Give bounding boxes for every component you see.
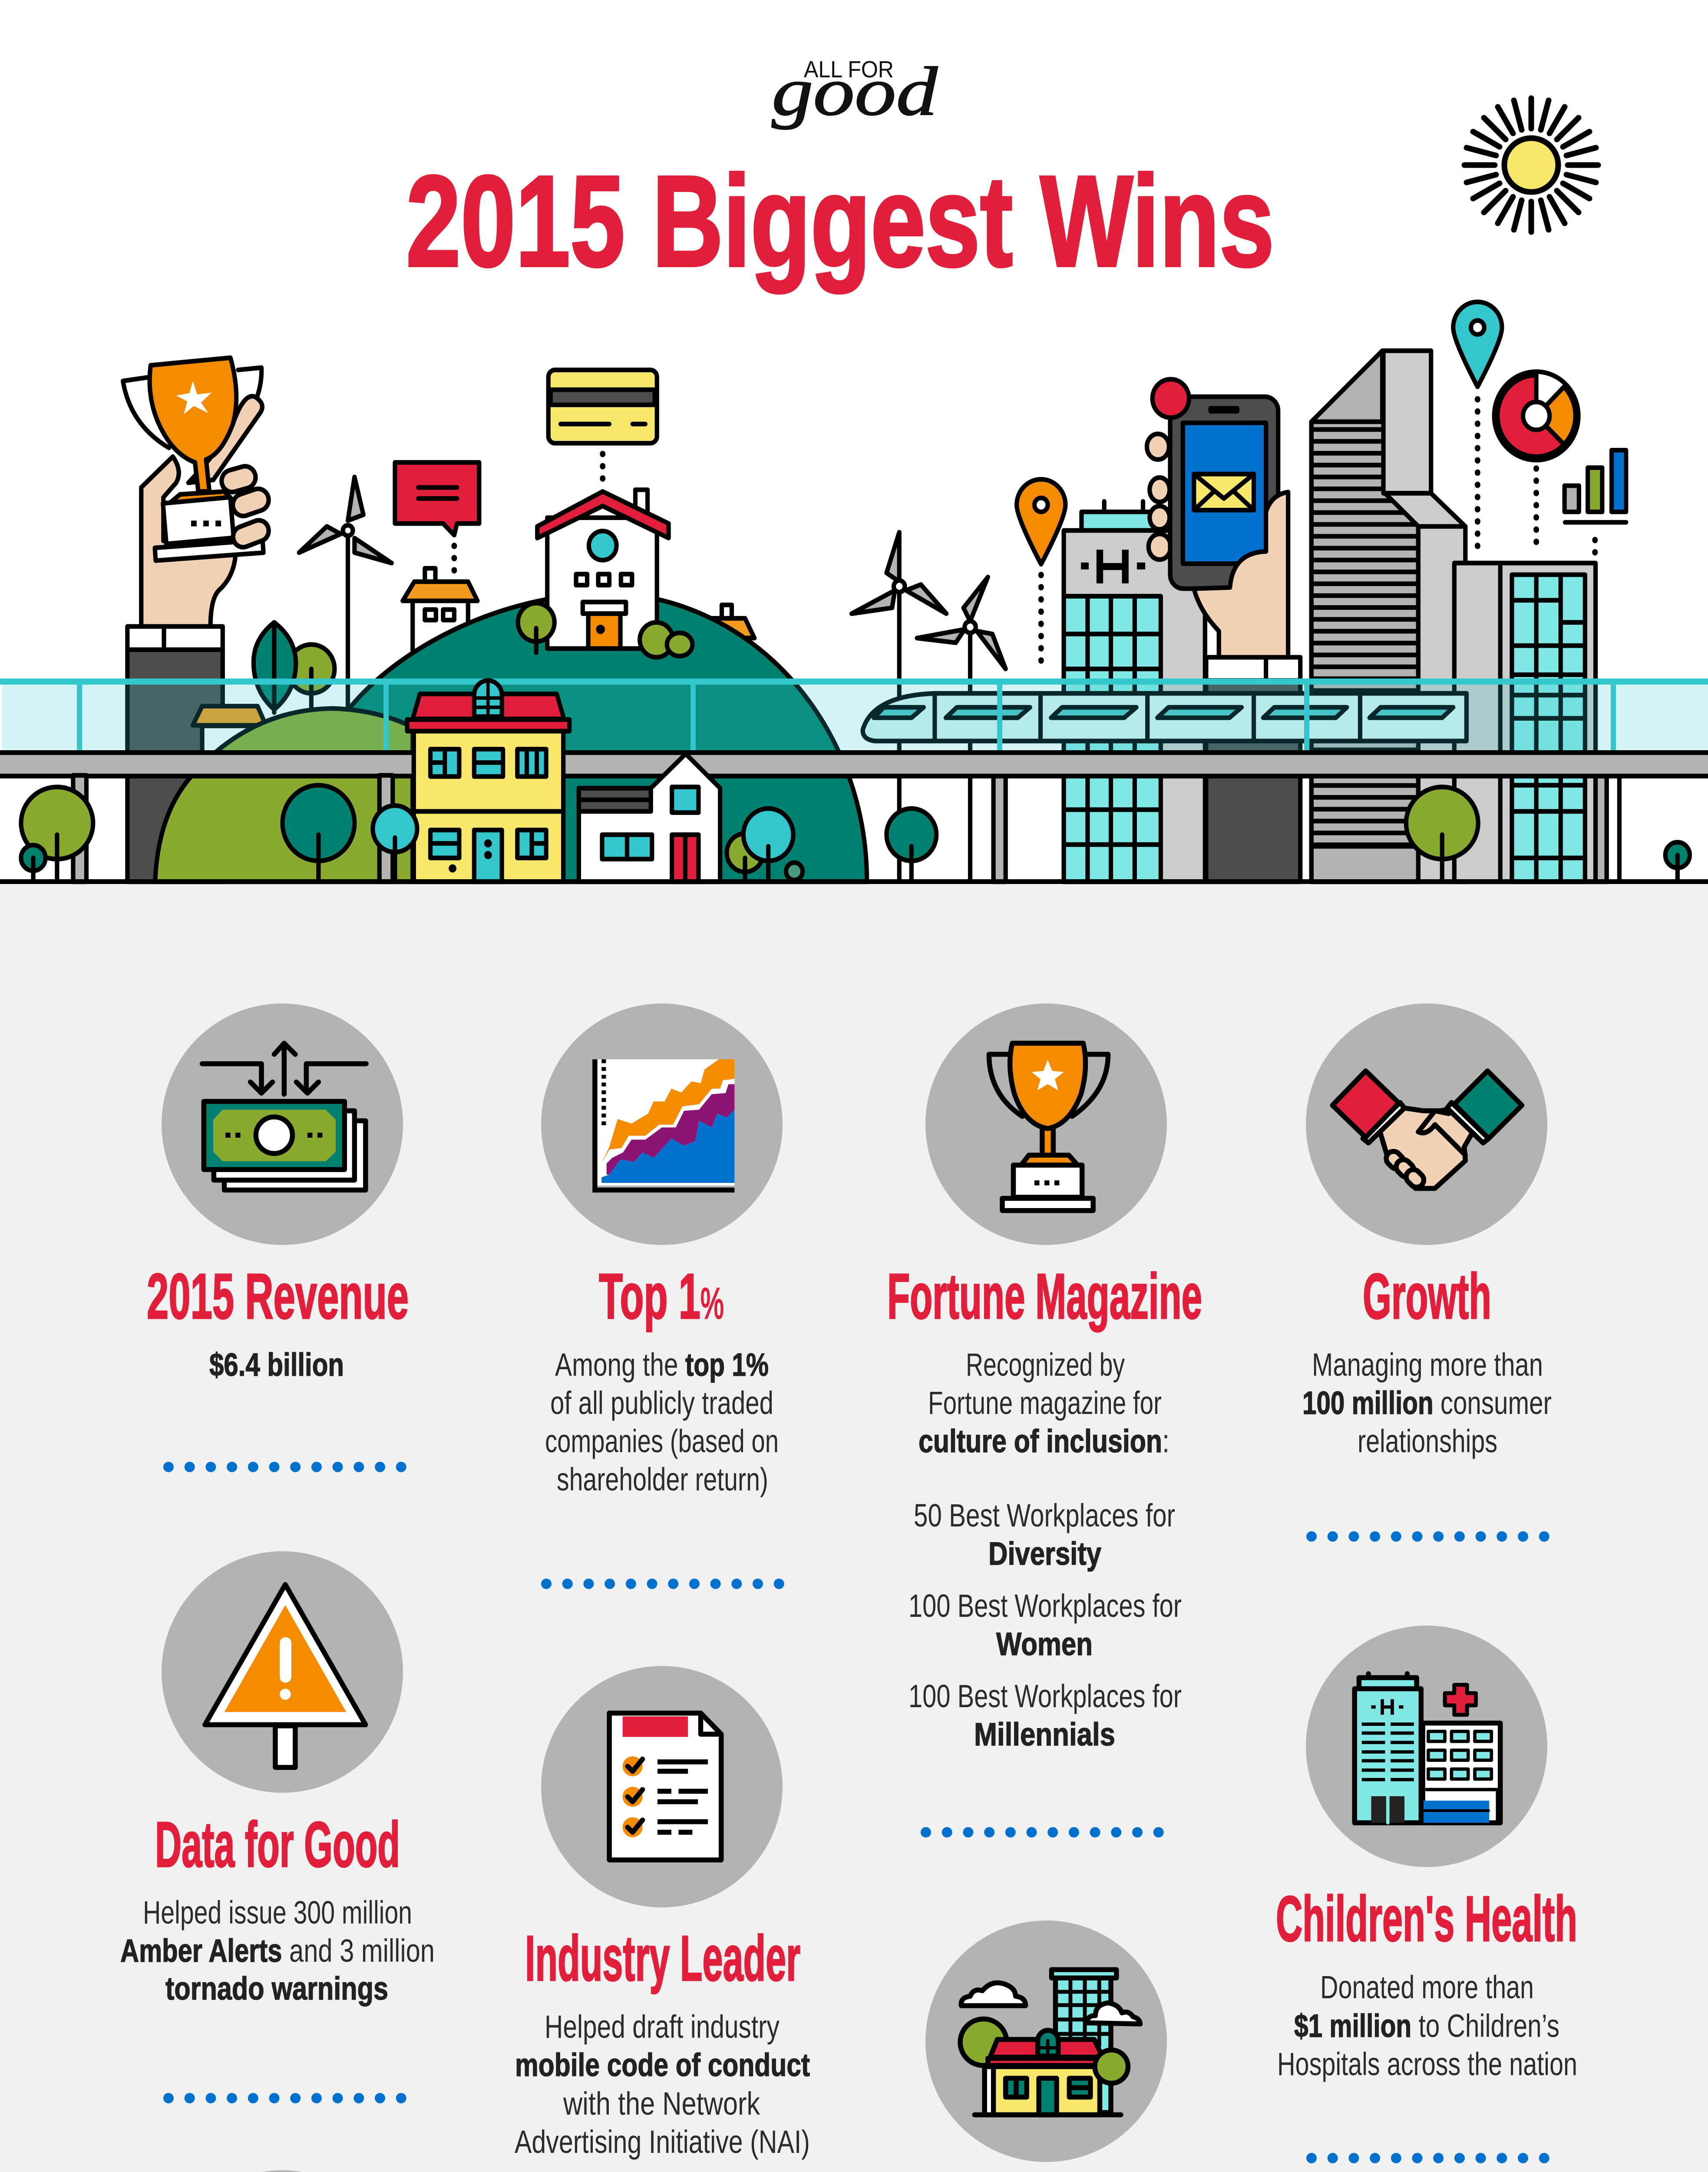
text: with the Network <box>563 2086 760 2122</box>
panel: Children's Health <box>1276 1626 1577 2082</box>
logo: All For Good: good <box>772 53 938 130</box>
text: culture of inclusion: <box>918 1423 1170 1459</box>
skyscraper <box>1312 351 1465 882</box>
house on the hill <box>537 490 669 649</box>
text: Millennials <box>974 1716 1115 1752</box>
road pillars <box>73 775 393 882</box>
divider dots <box>1312 2153 1547 2163</box>
divider dots <box>926 1827 1161 1838</box>
text: Helped issue 300 million <box>143 1894 412 1930</box>
leaf trees <box>254 622 334 712</box>
panel: Community <box>917 1920 1173 2172</box>
text: Donated more than <box>1320 1969 1534 2005</box>
panel: Training <box>135 2170 418 2172</box>
wind turbines <box>852 532 1006 882</box>
text: of all publicly traded <box>550 1385 773 1421</box>
panel: 2015 Revenue <box>147 1003 409 1383</box>
panel: Fortune Magazine <box>887 1003 1202 1752</box>
text <box>1277 1969 1577 2082</box>
text: relationships <box>1358 1423 1497 1459</box>
trees and bushes on hill <box>518 603 692 657</box>
scene: foreground right trees <box>886 787 1690 882</box>
wind turbine <box>299 477 392 710</box>
panel: Data for Good <box>120 1551 435 2006</box>
scene: foreground left <box>21 681 803 882</box>
text: $6.4 billion <box>209 1347 344 1383</box>
icon: town <box>960 1970 1140 2115</box>
panel: Industry Leader <box>515 1666 810 2160</box>
train <box>863 693 1467 741</box>
heading: Growth <box>1363 1261 1491 1332</box>
icon: sun <box>1464 98 1598 232</box>
text: tornado warnings <box>165 1970 388 2006</box>
text: Helped draft industry <box>545 2009 780 2045</box>
map pin orange <box>1017 479 1065 672</box>
arm and hand holding trophy <box>123 358 271 882</box>
icon: money <box>202 1043 366 1190</box>
house behind the hill <box>695 605 754 660</box>
divider dots <box>1312 1531 1547 1542</box>
panel: Top 1% <box>541 1003 783 1497</box>
text <box>120 1894 435 2006</box>
foreground trees <box>21 785 803 882</box>
house under small hill <box>193 706 266 755</box>
text <box>1302 1347 1552 1459</box>
heading: Fortune Magazine <box>887 1261 1202 1332</box>
small house orange roof <box>403 568 477 653</box>
text: 50 Best Workplaces for <box>914 1497 1175 1533</box>
text: companies (based on <box>545 1423 779 1459</box>
hospital building <box>1064 501 1205 882</box>
text: mobile code of conduct <box>515 2047 810 2083</box>
arm and hand holding phone <box>1147 379 1300 882</box>
text: Recognized by <box>966 1347 1125 1383</box>
text: Managing more than <box>1312 1347 1543 1383</box>
donut chart <box>1494 372 1579 553</box>
text: Among the top 1% <box>555 1347 769 1383</box>
icon: handshake <box>1332 1071 1522 1190</box>
title: 2015 Biggest Wins <box>406 149 1274 294</box>
text: Amber Alerts and 3 million <box>120 1933 435 1969</box>
logo: All For Good: ALL FOR <box>804 56 894 83</box>
text: Hospitals across the nation <box>1277 2046 1577 2082</box>
small green hill <box>155 709 413 882</box>
text: 100 Best Workplaces for <box>909 1588 1182 1624</box>
icon: trophy <box>989 1043 1108 1211</box>
text: $1 million to Children’s <box>1294 2008 1559 2044</box>
bar chart <box>1565 450 1626 553</box>
divider dots <box>546 1579 782 1589</box>
heading: Data for Good <box>155 1809 400 1881</box>
heading: Industry Leader <box>525 1923 800 1994</box>
heading: 2015 Revenue <box>147 1261 409 1332</box>
text <box>545 1347 779 1497</box>
icon: warning sign <box>205 1585 366 1768</box>
text: 100 Best Workplaces for <box>909 1678 1182 1714</box>
yellow building <box>407 681 569 882</box>
divider dots <box>168 2093 404 2103</box>
elevated road <box>0 750 1708 778</box>
text <box>909 1347 1182 1752</box>
text: Advertising Initiative (NAI) <box>515 2124 810 2160</box>
text: 100 million consumer <box>1302 1385 1552 1421</box>
office tower <box>1454 563 1619 882</box>
white house <box>579 754 720 882</box>
text <box>515 2009 810 2160</box>
credit card <box>548 370 657 480</box>
speech bubble <box>395 463 479 573</box>
glass railing <box>0 679 1708 752</box>
map pin teal <box>1453 302 1502 553</box>
text: shareholder return) <box>557 1461 768 1497</box>
ground line hero <box>0 879 1708 884</box>
text: Diversity <box>988 1536 1101 1572</box>
text: Fortune magazine for <box>928 1385 1162 1421</box>
divider dots <box>168 1462 404 1472</box>
icon: area chart <box>595 1060 734 1190</box>
icon: hospital <box>1355 1674 1500 1823</box>
heading: Top 1% <box>599 1261 724 1332</box>
big teal hill <box>346 593 867 882</box>
icon: checklist <box>609 1713 721 1860</box>
scene: right skyline <box>852 302 1626 882</box>
scene: left hand with trophy, hills and houses <box>123 358 867 882</box>
panel: Growth <box>1302 1003 1552 1459</box>
text: Women <box>996 1626 1093 1662</box>
